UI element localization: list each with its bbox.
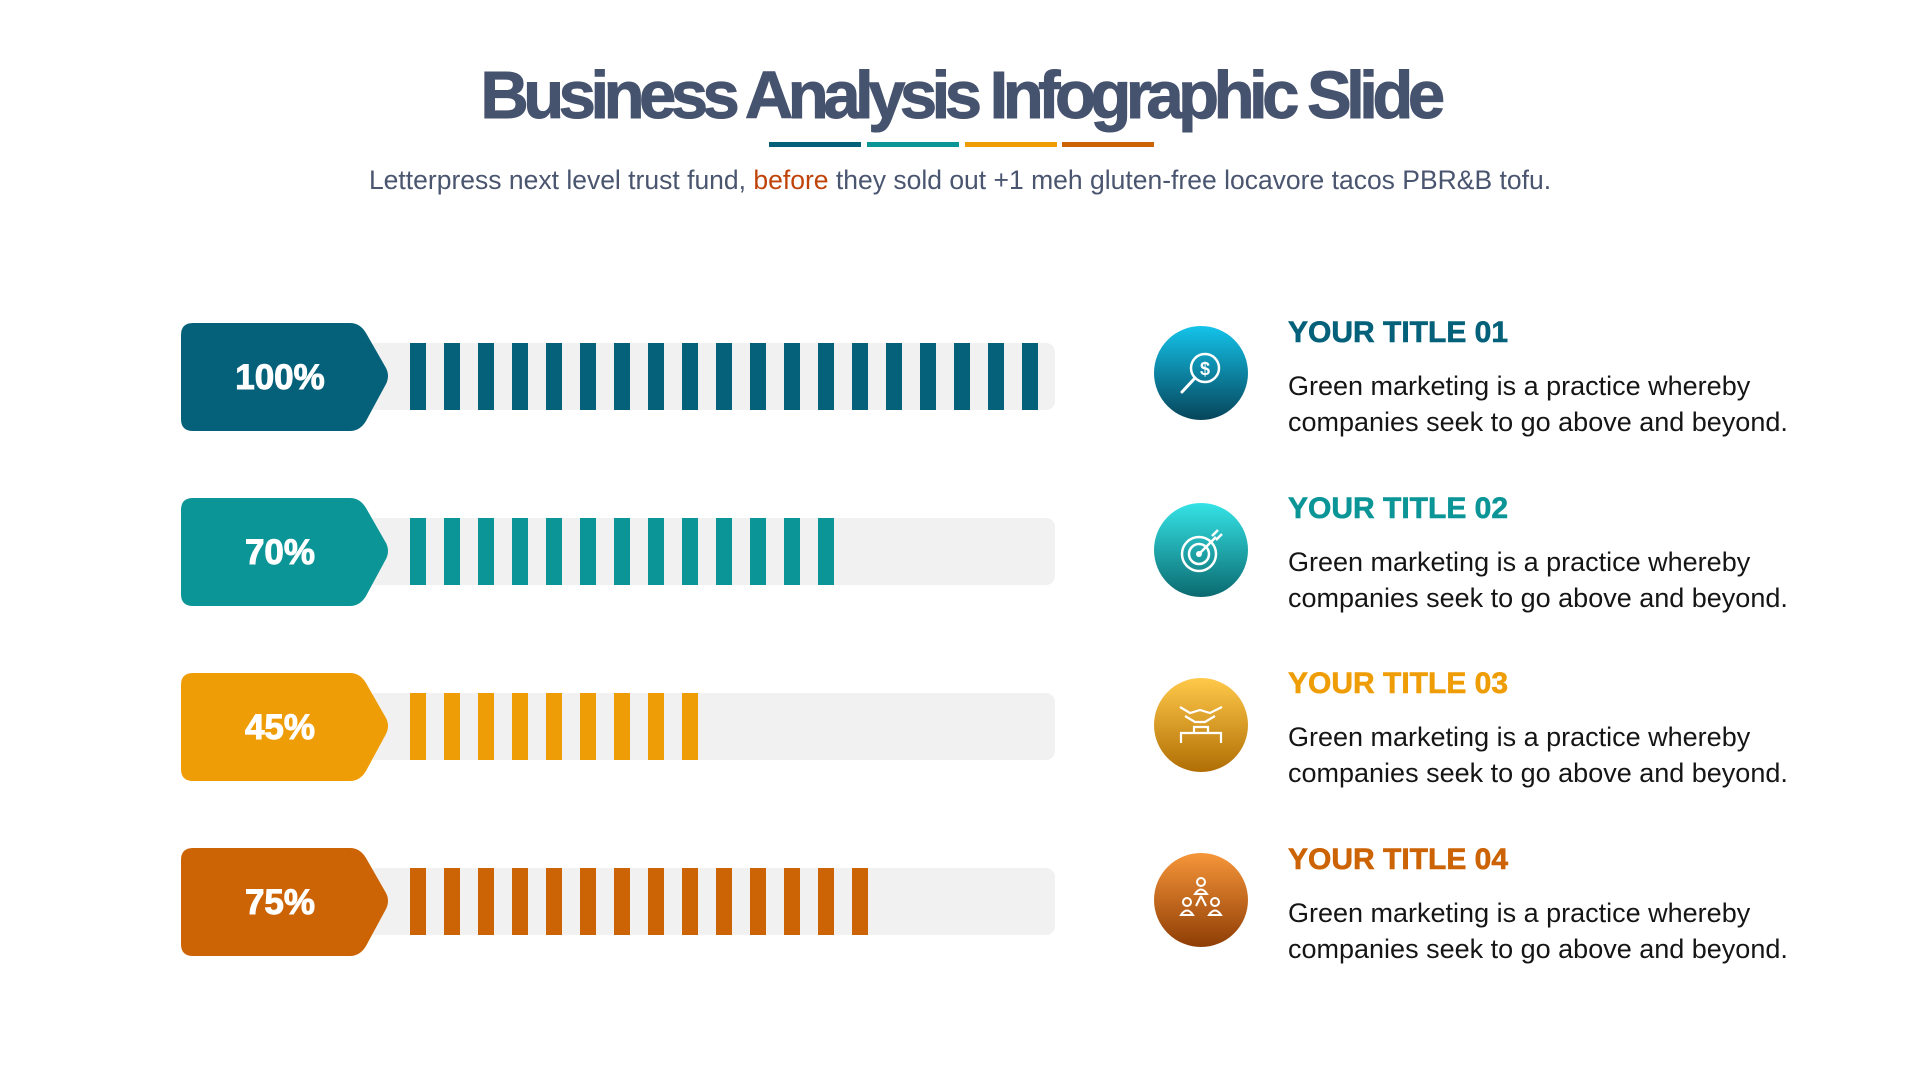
text 4 [1288,898,1788,964]
item 2 [1288,492,1788,613]
text 1: Green marketing is a practice whereby [1288,371,1750,401]
item 3 [1288,667,1788,788]
text 2: companies seek to go above and beyond. [1288,583,1788,613]
text 1: companies seek to go above and beyond. [1288,407,1788,437]
text 1 [1288,371,1788,437]
bar 2: 70% [181,498,1055,606]
bar 3: 45% [181,673,1055,781]
heading 1: YOUR TITLE 01 [1288,316,1508,349]
icon: target [1154,503,1248,597]
heading 3: YOUR TITLE 03 [1288,667,1508,700]
item 1 [1288,316,1788,437]
bar 1: 100%: 100% [235,358,325,397]
title underline [769,142,1154,147]
text 4: Green marketing is a practice whereby [1288,898,1750,928]
bar 3: 45%: 45% [245,708,315,747]
icon: handshake [1154,678,1248,772]
bar 4: 75% [181,848,1055,956]
icon: magnifier dollar [1154,326,1248,420]
icon: team hierarchy [1154,853,1248,947]
heading 4: YOUR TITLE 04 [1288,843,1508,876]
text 2: Green marketing is a practice whereby [1288,547,1750,577]
bar chart [181,323,1055,956]
icon: magnifier dollar: $ [1200,359,1210,379]
title: Business Analysis Infographic Slide [480,58,1440,133]
bar 2: 70%: 70% [245,533,315,572]
bar 1: 100% [181,323,1055,431]
text 2 [1288,547,1788,613]
item 4 [1288,843,1788,964]
text 3 [1288,722,1788,788]
icons column [1154,326,1248,947]
bar 4: 75%: 75% [245,883,315,922]
text 3: companies seek to go above and beyond. [1288,758,1788,788]
text 3: Green marketing is a practice whereby [1288,722,1750,752]
text 4: companies seek to go above and beyond. [1288,934,1788,964]
subtitle: Letterpress next level trust fund, before they sold out +1 meh gluten-free locavore tacos PBR&B tofu. [369,165,1551,195]
heading 2: YOUR TITLE 02 [1288,492,1508,525]
